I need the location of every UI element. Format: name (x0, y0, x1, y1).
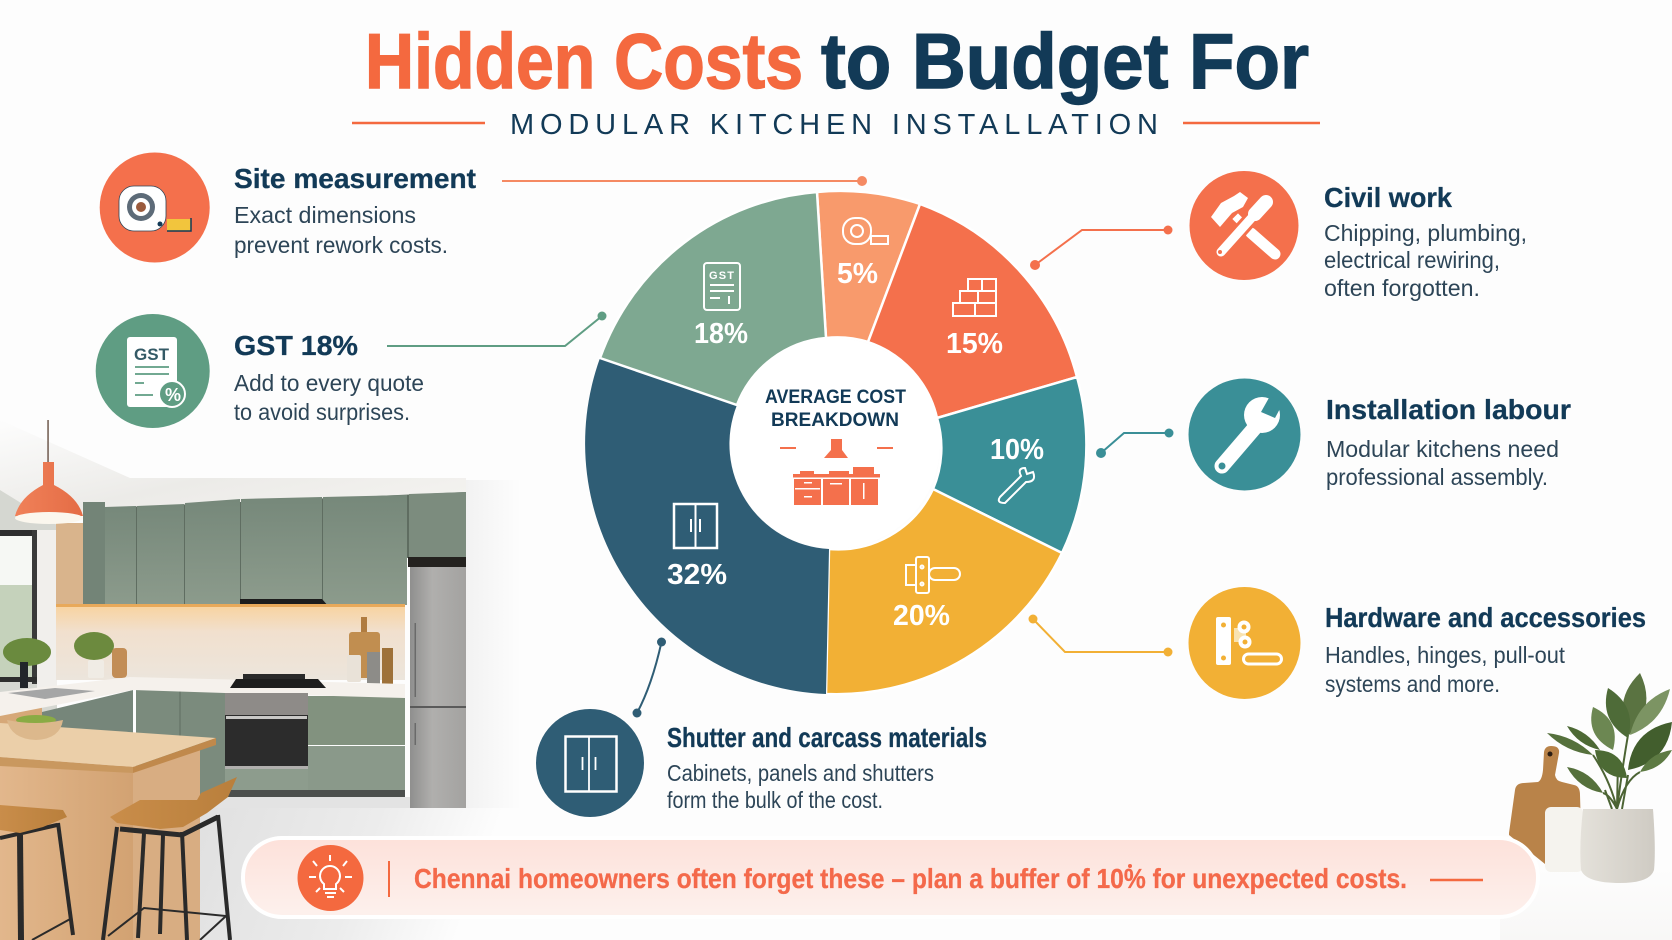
counter (0, 677, 405, 716)
description (1326, 436, 1559, 490)
connector (1096, 428, 1174, 458)
fridge (408, 557, 466, 808)
description (234, 370, 424, 425)
description: Handles, hinges, pull-out (1325, 642, 1566, 668)
description: form the bulk of the cost. (667, 787, 883, 813)
pot (1580, 809, 1655, 883)
panel: installation labour (1096, 378, 1571, 490)
description (234, 202, 448, 258)
icon: kitchen (780, 439, 893, 505)
connector (387, 312, 606, 346)
slice: site measurement 5% (817, 191, 920, 342)
panel: site measurement (100, 152, 867, 262)
range hood (240, 599, 329, 607)
lower cabinets (0, 690, 405, 797)
description: Exact dimensions (234, 202, 416, 228)
callout banner (243, 838, 1538, 917)
percentage labels (667, 258, 1044, 632)
slice: civil work 15% (868, 204, 1077, 418)
percentage labels: 10% (990, 434, 1044, 466)
connector (632, 638, 666, 718)
icon: GST document (96, 314, 210, 428)
upper cabinets (105, 492, 466, 605)
subtitle: MODULAR KITCHEN INSTALLATION (510, 109, 1158, 141)
bowl (7, 715, 63, 740)
description: Add to every quote (234, 370, 424, 396)
icon: light bulb (298, 845, 364, 911)
icon: hinge and handle (1188, 587, 1300, 699)
description (1325, 642, 1566, 697)
icon: tape in slice (843, 218, 888, 244)
oven (225, 693, 308, 769)
floor (200, 797, 410, 808)
panel: GST (96, 312, 606, 428)
icon: hammer and chisel (1190, 171, 1298, 280)
description: systems and more. (1325, 671, 1500, 697)
connector (1030, 226, 1172, 270)
heading: Hardware and accessories (1325, 602, 1646, 633)
percentage labels: 18% (694, 318, 748, 350)
kitchen photo illustration (0, 420, 521, 940)
heading: Civil work (1324, 182, 1452, 213)
percentage labels: 5% (837, 258, 878, 290)
title (365, 17, 1309, 105)
icon: tape measure (100, 152, 210, 262)
backsplash (56, 606, 405, 680)
icon: hinge in slice (906, 557, 960, 593)
panel: shutter and carcass materials (536, 638, 987, 817)
slice: GST 18% (600, 192, 826, 405)
decor: plant, jar and chopping board (1509, 673, 1672, 883)
description: Cabinets, panels and shutters (667, 760, 934, 786)
icon: bricks in slice (953, 279, 996, 316)
cooktop (230, 674, 326, 688)
description: to avoid surprises. (234, 399, 410, 425)
centre label: BREAKDOWN (771, 410, 899, 431)
slice: shutter and carcass 32% (585, 358, 829, 694)
chopping board (1509, 746, 1582, 865)
callout text: Chennai homeowners often forget these – plan a buffer of 10% for unexpected costs. (414, 863, 1407, 894)
description (667, 760, 934, 813)
heading: Site measurement (234, 163, 476, 194)
description: electrical rewiring, (1324, 247, 1500, 273)
percentage labels: 15% (946, 328, 1003, 360)
cutting board and bottles (347, 617, 393, 684)
description: often forgotten. (1324, 275, 1480, 301)
heading: GST 18% (234, 330, 358, 361)
icon: door in slice (674, 504, 717, 548)
heading: Shutter and carcass materials (667, 722, 987, 753)
centre label: AVERAGE COST (765, 387, 906, 408)
decor: counter surface (1500, 868, 1672, 940)
description: prevent rework costs. (234, 232, 448, 258)
slice: hardware 20% (826, 489, 1062, 694)
percentage labels: 32% (667, 559, 727, 591)
title: to Budget For (821, 17, 1309, 105)
candle jar (1545, 807, 1583, 872)
icon: GST document in slice: GST (709, 270, 734, 282)
description: Chipping, plumbing, (1324, 220, 1527, 246)
pendant lamp (15, 420, 83, 524)
percentage labels: 20% (893, 600, 950, 632)
description: Modular kitchens need (1326, 436, 1559, 462)
plant leaves (1547, 673, 1672, 809)
centre label (765, 387, 906, 431)
icon: GST document: GST (134, 345, 170, 364)
donut chart: average cost breakdown (585, 191, 1086, 694)
centre hole (730, 338, 940, 548)
stools (0, 777, 237, 940)
icon: GST document: % (165, 385, 181, 405)
slice: installation labour 10% (933, 377, 1086, 553)
heading: Installation labour (1326, 394, 1571, 425)
icon: wrench (1188, 378, 1300, 490)
description (1324, 220, 1527, 301)
icon: wrench in slice (999, 468, 1034, 503)
icon: cabinet door (536, 709, 644, 817)
window (0, 530, 37, 684)
island (0, 723, 216, 940)
panel: hardware and accessories (1028, 587, 1646, 699)
icon: GST document in slice (704, 263, 740, 310)
connector (1028, 614, 1172, 656)
connector (502, 176, 867, 186)
description: professional assembly. (1326, 464, 1548, 490)
panel: civil work (1030, 171, 1527, 301)
title: Hidden Costs (365, 17, 803, 105)
plant on counter (3, 632, 127, 688)
